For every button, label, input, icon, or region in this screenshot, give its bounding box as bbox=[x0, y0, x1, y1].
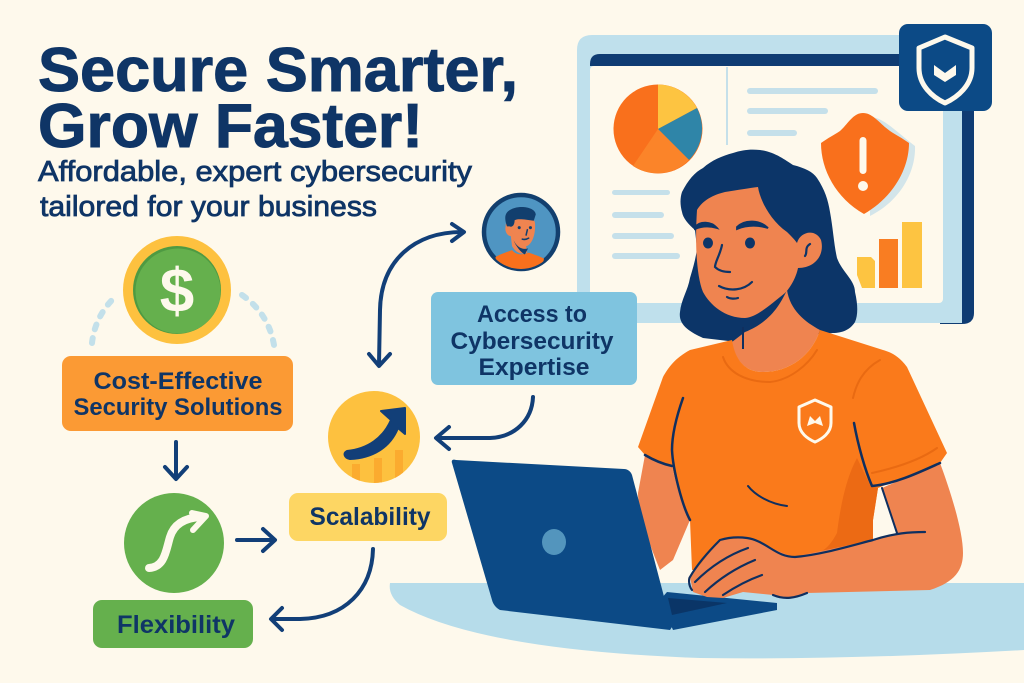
neck hair line bbox=[742, 327, 744, 349]
panel: access to cybersecurity expertise bbox=[431, 292, 637, 385]
monitor frame bbox=[940, 110, 974, 324]
eyebrows and eyes bbox=[695, 221, 768, 248]
subtitle: tailored for your business bbox=[40, 191, 377, 223]
panel: cost-effective bbox=[62, 236, 293, 431]
arrow: flexibility to scalability bbox=[237, 529, 275, 551]
collar and sleeve details bbox=[723, 350, 937, 473]
panel: access to cybersecurity expertise: Cybersecurity bbox=[450, 328, 614, 355]
arrow: cost to flexibility bbox=[165, 442, 187, 479]
left arm bbox=[638, 455, 690, 570]
title bbox=[38, 36, 518, 161]
t-shirt bbox=[638, 330, 947, 570]
face bbox=[696, 187, 822, 318]
subtitle: Affordable, expert cybersecurity bbox=[38, 156, 473, 188]
label box bbox=[289, 493, 447, 541]
icon: dollar coin bbox=[123, 236, 231, 344]
label box: Cost-Effective bbox=[94, 368, 262, 395]
text lines bbox=[612, 88, 878, 259]
badge: shield logo bbox=[899, 24, 992, 111]
shirt shadow bbox=[820, 458, 878, 552]
nose, mouth and ear bbox=[715, 244, 810, 299]
label box: Flexibility bbox=[117, 611, 235, 639]
hand outlines bbox=[689, 532, 925, 598]
panel: flexibility bbox=[93, 493, 253, 648]
shirt outlines bbox=[645, 398, 940, 533]
icon: curved arrow bbox=[124, 493, 224, 593]
right arm bbox=[760, 463, 963, 598]
neck bbox=[732, 290, 820, 372]
arrow: avatar to scalability bbox=[369, 224, 464, 366]
bar chart bbox=[857, 222, 922, 288]
icon: desk surface bbox=[390, 583, 1024, 658]
panel: scalability bbox=[289, 391, 447, 541]
panel: access to cybersecurity expertise: Access to bbox=[477, 301, 587, 328]
arrow: expertise to scalability bbox=[436, 397, 533, 449]
subtitle bbox=[38, 156, 473, 223]
icon: warning shield bbox=[821, 113, 915, 216]
hair bbox=[680, 150, 857, 342]
arrow: scalability to flexibility bbox=[271, 549, 373, 630]
shirt logo bbox=[799, 400, 831, 442]
label box bbox=[93, 600, 253, 648]
label box: Scalability bbox=[310, 503, 431, 531]
panel: monitor dashboard bbox=[577, 35, 974, 324]
illustration: woman at laptop bbox=[452, 150, 963, 630]
label box: Security Solutions bbox=[74, 394, 282, 421]
title: Grow Faster! bbox=[38, 92, 423, 161]
icon: dollar coin: $ bbox=[160, 257, 194, 326]
hand bbox=[690, 538, 807, 598]
laptop bbox=[452, 460, 777, 630]
icon: growth arrow bbox=[328, 391, 420, 490]
title: Secure Smarter, bbox=[38, 36, 518, 105]
label box bbox=[62, 356, 293, 431]
dashed arc bbox=[92, 295, 274, 345]
panel: access to cybersecurity expertise: Expertise bbox=[478, 354, 590, 381]
pie chart bbox=[614, 84, 702, 174]
icon: expert avatar bbox=[484, 195, 558, 270]
